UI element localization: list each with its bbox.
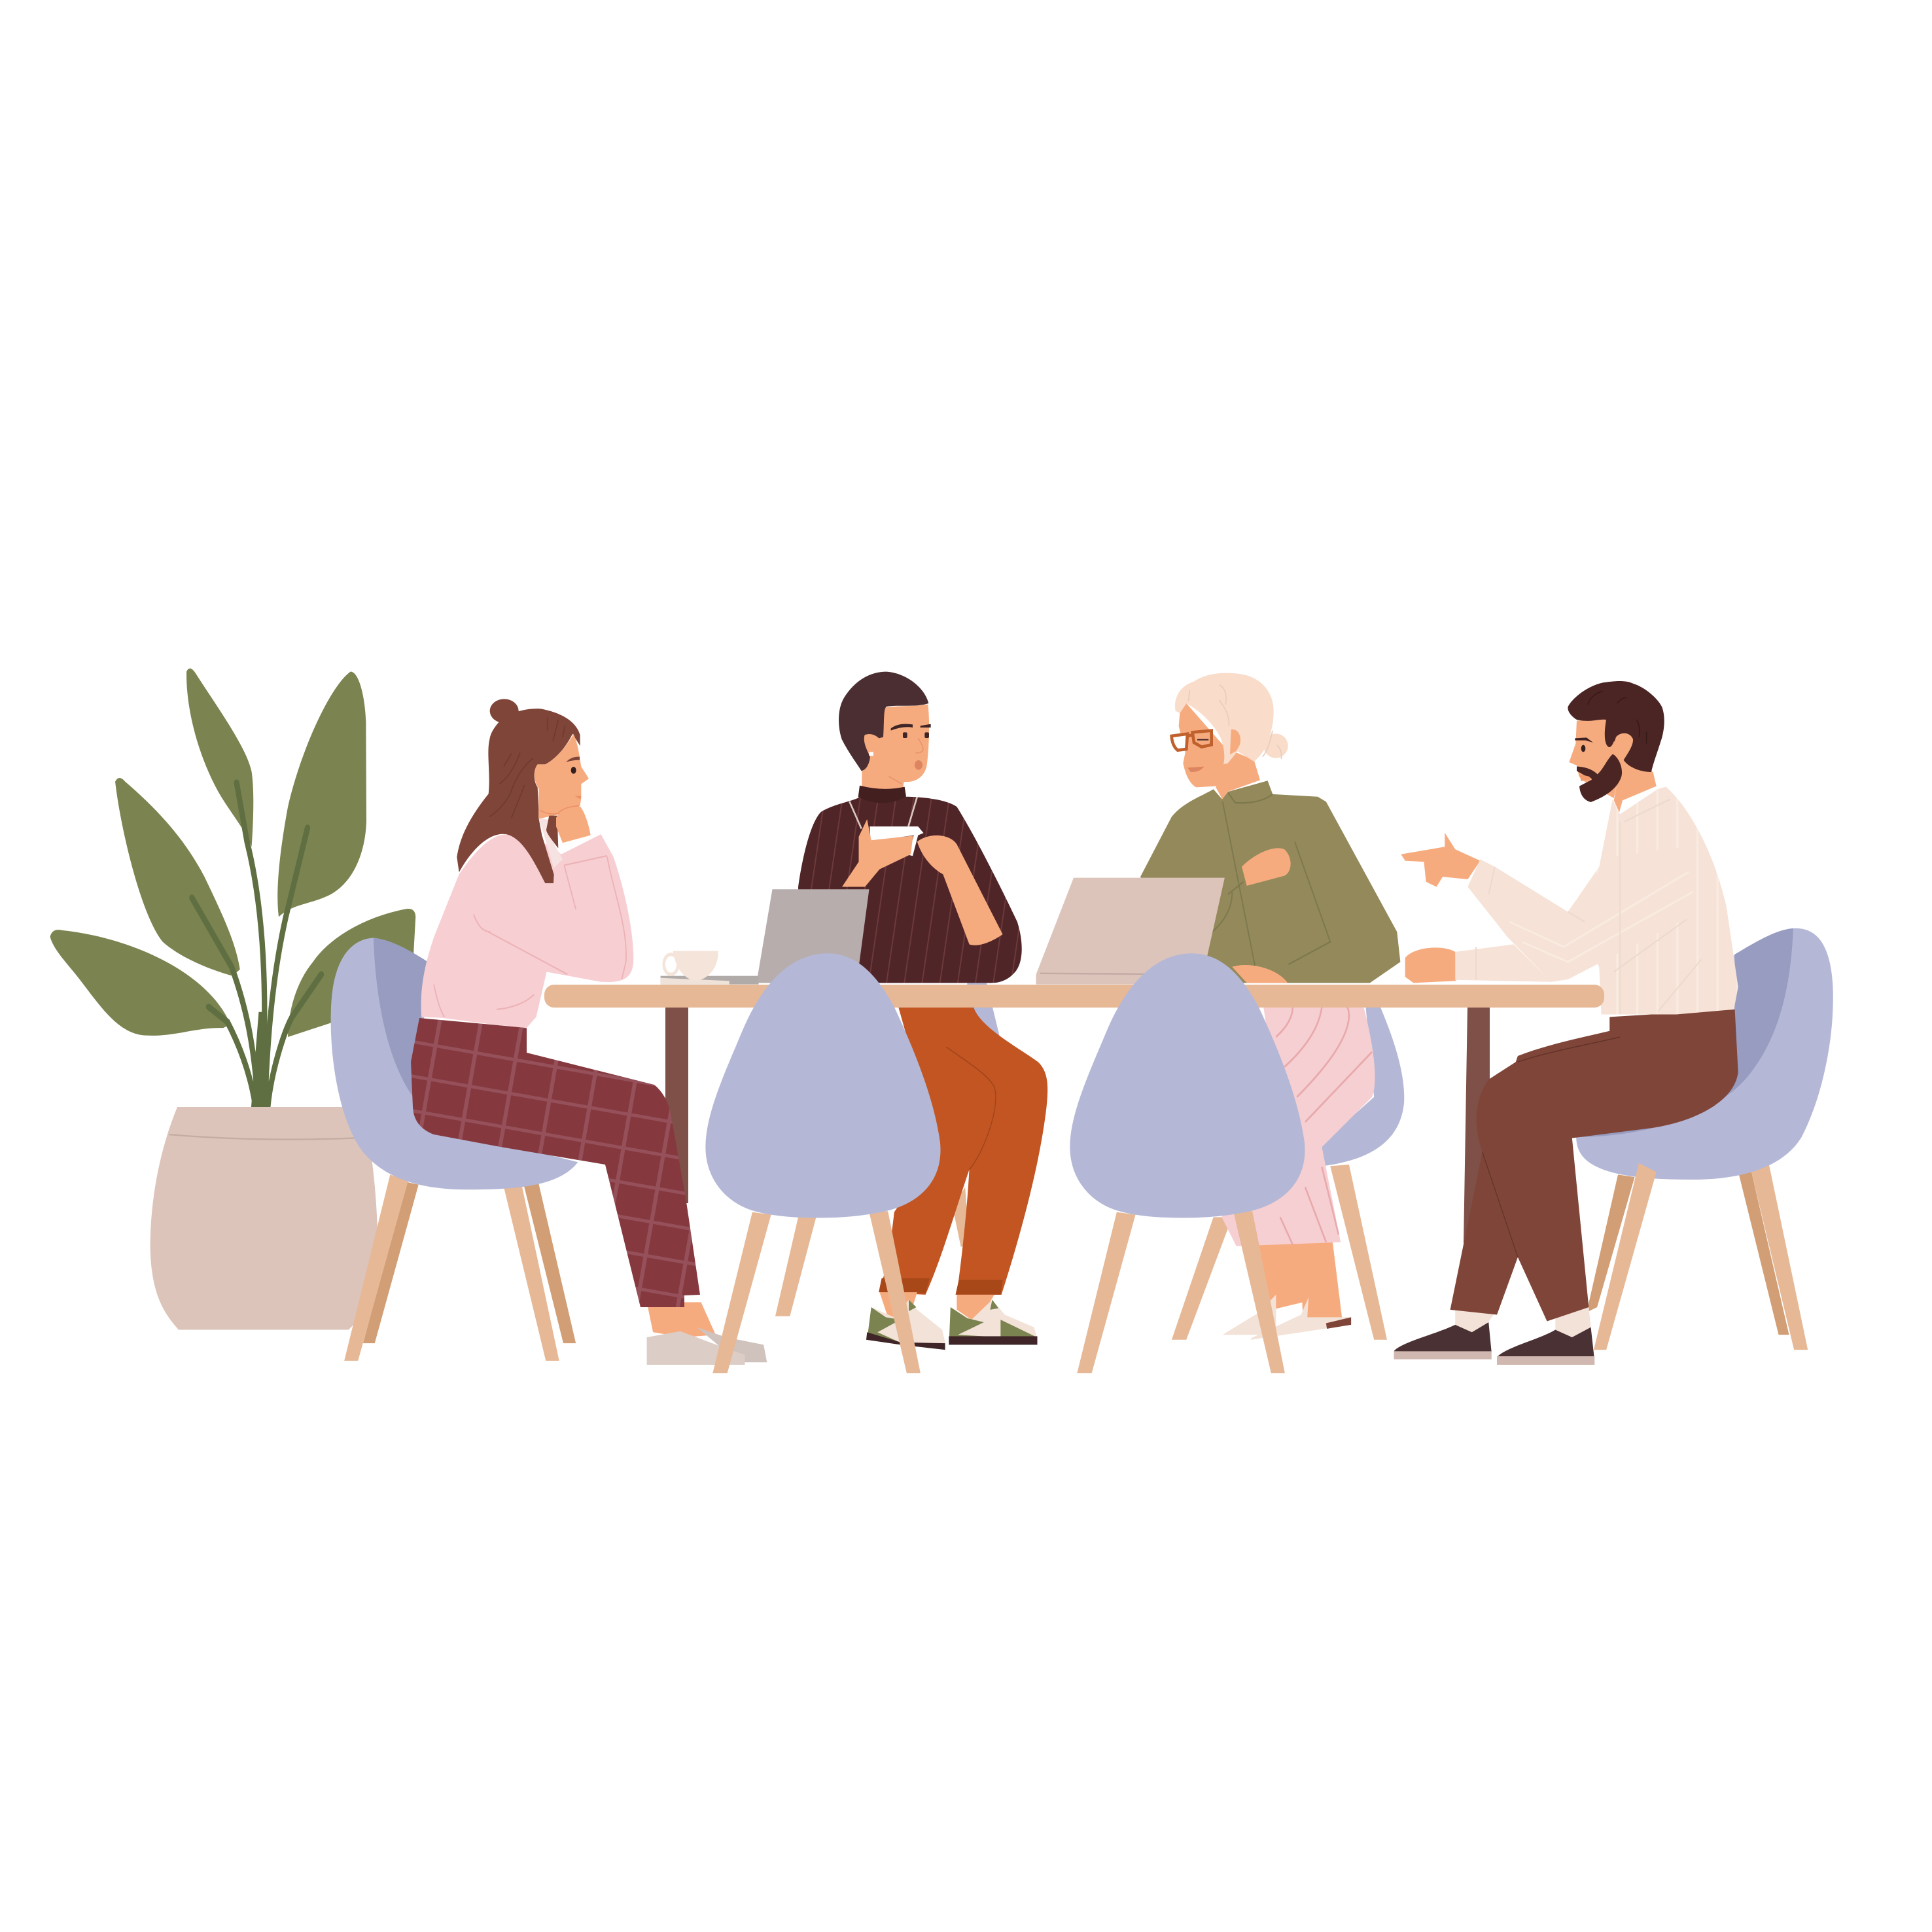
hands of person 3 (1232, 848, 1291, 983)
person 4: bearded man in striped shirt (1394, 681, 1833, 1365)
table legs (665, 1007, 1490, 1243)
chair: right person (1576, 928, 1833, 1350)
laptop: beige (1036, 878, 1225, 985)
hands and forearm (842, 819, 1003, 945)
person 2: woman in dark sweater and orange trousers (798, 672, 1047, 1350)
laptop: grey (661, 889, 869, 985)
plant leaves (50, 669, 415, 1037)
pink sweater (421, 834, 633, 1028)
pot (150, 1107, 378, 1329)
hands of person 4 (1401, 833, 1481, 983)
table top (544, 985, 1604, 1008)
olive shirt (1140, 781, 1400, 983)
striped shirt (1455, 786, 1738, 1015)
head of person 3 (1172, 673, 1288, 799)
chair: left person (331, 938, 578, 1361)
lower body of person 2 (866, 972, 1047, 1350)
head of person 4 (1568, 681, 1664, 813)
front chair: right (1070, 953, 1305, 1373)
coffee cup and saucer (661, 951, 729, 985)
front chair: left (705, 953, 941, 1373)
plant stems (192, 782, 321, 1107)
chair, legs, shoes and skirt of person 3 (1172, 1007, 1404, 1340)
person 1: woman in pink sweater and plaid trousers (411, 699, 767, 1365)
head of person 2 (839, 672, 931, 829)
plant in pot (50, 669, 415, 1329)
laptops and coffee cup on table (661, 878, 1225, 985)
dark ribbed sweater (798, 797, 1022, 983)
plaid trousers (411, 1018, 700, 1307)
person 3: older woman in olive shirt and pink skirt (1140, 673, 1404, 1340)
head of person 1 (457, 699, 591, 883)
trousers and shoes (1394, 1010, 1738, 1365)
ankles and sneakers (647, 1302, 767, 1365)
coffee cup in hands (869, 826, 924, 856)
